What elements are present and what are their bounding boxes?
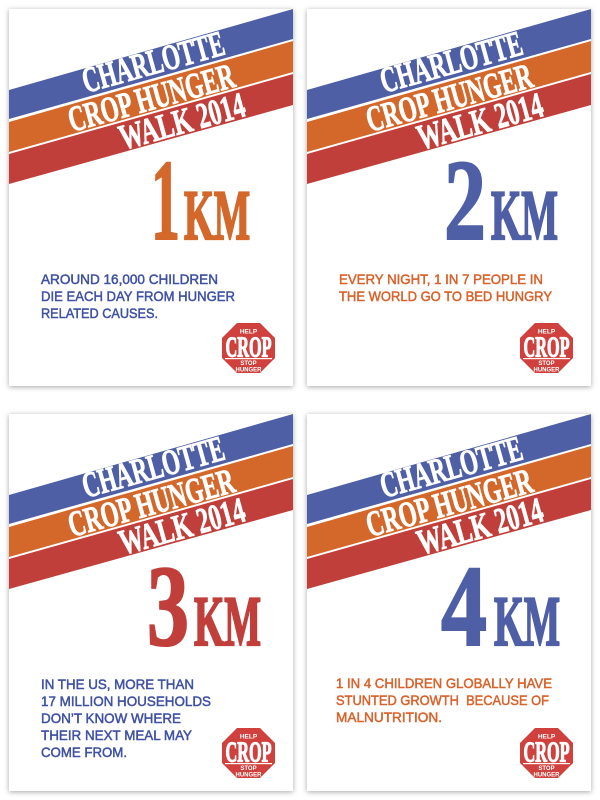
banner stripes with title [307, 414, 591, 589]
fact text: DIE EACH DAY FROM HUNGER [41, 288, 235, 304]
distance number: 3 [147, 543, 189, 671]
icon: CROP stop sign logo [520, 323, 573, 374]
distance number: 2 [444, 137, 486, 265]
fact text: THEIR NEXT MEAL MAY [41, 727, 193, 743]
icon: CROP stop sign logo: HELP [240, 734, 258, 740]
fact text: MALNUTRITION. [336, 709, 442, 725]
fact text: AROUND 16,000 CHILDREN [41, 271, 218, 287]
distance number: 1 [151, 137, 180, 265]
fact text [336, 675, 552, 725]
banner stripes with title [9, 9, 293, 184]
fact text [339, 271, 553, 304]
panel: 2 km card [307, 9, 591, 386]
fact text [41, 271, 235, 321]
icon: CROP stop sign logo [222, 323, 275, 374]
fact text: EVERY NIGHT, 1 IN 7 PEOPLE IN [339, 271, 543, 287]
icon: CROP stop sign logo: HUNGER [533, 368, 560, 374]
icon: CROP stop sign logo: STOP [240, 361, 257, 367]
fact text: IN THE US, MORE THAN [41, 676, 194, 692]
fact text: RELATED CAUSES. [41, 305, 158, 321]
fact text: DON’T KNOW WHERE [41, 710, 181, 726]
banner stripes with title [9, 414, 293, 589]
fact text: 1 IN 4 CHILDREN GLOBALLY HAVE [336, 675, 552, 691]
fact text: STUNTED GROWTH BECAUSE OF [336, 692, 549, 708]
icon: CROP stop sign logo: HUNGER [235, 368, 262, 374]
icon: CROP stop sign logo [520, 728, 573, 778]
icon: CROP stop sign logo: STOP [538, 361, 555, 367]
distance number [441, 543, 560, 671]
fact text [41, 676, 211, 760]
icon: CROP stop sign logo: STOP [240, 766, 257, 772]
distance number [444, 137, 558, 265]
panel: 3 km card [9, 414, 293, 791]
distance number [151, 137, 250, 265]
icon: CROP stop sign logo: HUNGER [533, 772, 560, 778]
distance number: 4 [441, 543, 487, 671]
fact text: THE WORLD GO TO BED HUNGRY [339, 288, 553, 304]
icon: CROP stop sign logo: HELP [538, 328, 556, 336]
panel: 1 km card [9, 9, 293, 386]
icon: CROP stop sign logo [222, 728, 275, 778]
icon: CROP stop sign logo: HUNGER [235, 772, 262, 778]
distance number [147, 543, 261, 671]
fact text: 17 MILLION HOUSEHOLDS [41, 693, 211, 709]
banner stripes with title [307, 9, 591, 184]
icon: CROP stop sign logo: STOP [538, 766, 555, 772]
fact text: COME FROM. [41, 744, 127, 760]
icon: CROP stop sign logo: HELP [240, 328, 258, 336]
icon: CROP stop sign logo: HELP [538, 734, 556, 740]
panel: 4 km card [307, 414, 591, 791]
